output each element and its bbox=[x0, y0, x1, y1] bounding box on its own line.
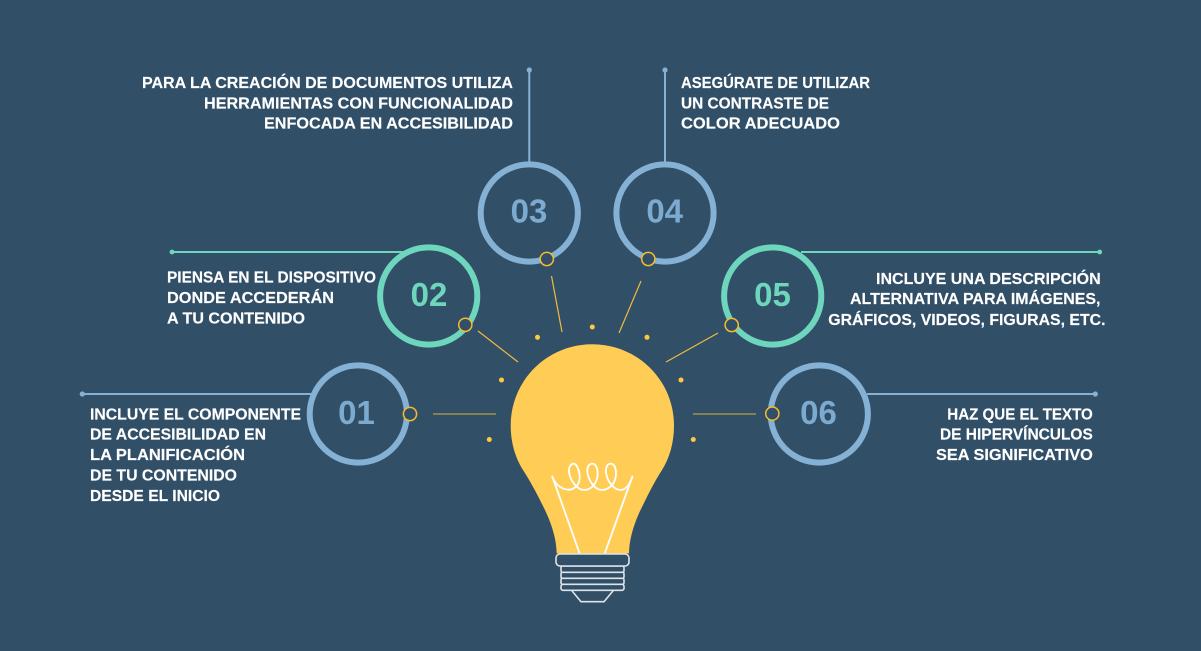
number 01: 01 bbox=[338, 394, 375, 431]
connector ring 03 bbox=[540, 252, 553, 266]
text 02: PIENSA EN EL DISPOSITIVO bbox=[167, 270, 376, 287]
filament bbox=[552, 464, 632, 553]
ring 04 bbox=[616, 164, 714, 262]
text 03: ENFOCADA EN ACCESIBILIDAD bbox=[264, 116, 513, 133]
ring 05 bbox=[724, 247, 821, 345]
leader line 04 bbox=[662, 67, 668, 164]
text 01: DESDE EL INICIO bbox=[90, 488, 220, 505]
step 03 bbox=[142, 67, 578, 266]
text 03: PARA LA CREACIÓN DE DOCUMENTOS UTILIZA bbox=[142, 73, 513, 92]
text 01: INCLUYE EL COMPONENTE bbox=[90, 406, 301, 423]
connector ring 06 bbox=[766, 407, 779, 420]
text 05: INCLUYE UNA DESCRIPCIÓN bbox=[876, 269, 1101, 288]
text 05: GRÁFICOS, VIDEOS, FIGURAS, ETC. bbox=[828, 310, 1106, 329]
leader line 02 bbox=[170, 250, 403, 254]
step 06 bbox=[766, 365, 1098, 464]
number 05: 05 bbox=[754, 276, 791, 313]
text 02: DONDE ACCEDERÁN bbox=[167, 288, 334, 307]
light rays bbox=[433, 276, 756, 414]
light bulb bbox=[511, 344, 674, 602]
text 01: DE TU CONTENIDO bbox=[90, 467, 237, 484]
number 02: 02 bbox=[411, 276, 447, 313]
ring 06 bbox=[771, 365, 868, 463]
leader line 03 bbox=[527, 67, 532, 164]
text 06: SEA SIGNIFICATIVO bbox=[936, 447, 1093, 464]
step 04 bbox=[616, 67, 870, 266]
text 04: ASEGÚRATE DE UTILIZAR bbox=[681, 73, 870, 92]
text 03 bbox=[142, 73, 513, 133]
connector ring 05 bbox=[725, 318, 738, 332]
text 05 bbox=[828, 269, 1106, 329]
step 02 bbox=[167, 247, 477, 345]
text 06: DE HIPERVÍNCULOS bbox=[940, 425, 1093, 444]
text 05: ALTERNATIVA PARA IMÁGENES, bbox=[850, 289, 1100, 308]
text 01 bbox=[90, 406, 301, 505]
ring 03 bbox=[481, 164, 578, 262]
leader line 01 bbox=[80, 391, 314, 397]
text 04: COLOR ADECUADO bbox=[681, 116, 840, 133]
number 03: 03 bbox=[511, 193, 547, 230]
text 06: HAZ QUE EL TEXTO bbox=[947, 406, 1093, 423]
ring 01 bbox=[310, 365, 407, 463]
connector ring 01 bbox=[403, 407, 417, 421]
step 05 bbox=[724, 247, 1106, 345]
text 02 bbox=[167, 270, 376, 328]
number 04: 04 bbox=[646, 193, 684, 230]
ring 02 bbox=[380, 247, 477, 345]
text 04: UN CONTRASTE DE bbox=[681, 95, 829, 112]
step 01 bbox=[80, 365, 417, 505]
text 06 bbox=[936, 406, 1093, 464]
leader line 05 bbox=[801, 250, 1102, 254]
text 02: A TU CONTENIDO bbox=[167, 311, 305, 328]
connector ring 02 bbox=[459, 318, 472, 331]
text 03: HERRAMIENTAS CON FUNCIONALIDAD bbox=[204, 95, 513, 112]
connector ring 04 bbox=[642, 252, 655, 266]
text 04 bbox=[681, 73, 870, 133]
light sparkle dots bbox=[487, 324, 696, 442]
number 06: 06 bbox=[800, 394, 837, 431]
text 01: DE ACCESIBILIDAD EN bbox=[90, 427, 266, 444]
leader line 06 bbox=[867, 391, 1098, 397]
bulb screw base bbox=[556, 554, 629, 602]
text 01: LA PLANIFICACIÓN bbox=[90, 445, 245, 464]
bulb glass bbox=[511, 344, 674, 554]
